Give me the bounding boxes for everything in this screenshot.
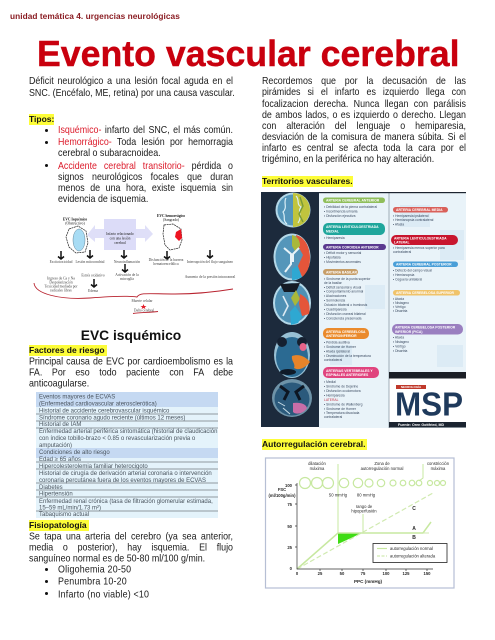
artery deficits: Oclusión bilateral o trombosis [324, 303, 368, 307]
artery deficits: ▪ Vértigo [393, 344, 406, 348]
list: flujo sanguíneo [45, 563, 149, 600]
list: tipos de EVC: evidencia de isquemia. [58, 193, 148, 204]
artery deficits: de la basilar [324, 281, 343, 285]
zone labels: autorregulación normal [361, 466, 403, 471]
scan 1 [276, 192, 310, 228]
list: tipos de EVC: cerebral o subaracnoidea. [58, 147, 161, 158]
artery deficits: ▪ Hemianopsia [393, 273, 414, 277]
artery pills: ARTERIA LENTICULOESTRIADA [394, 236, 447, 240]
outcome [131, 299, 158, 314]
table: eventos mayores de ECVAS: con índice tobillo-brazo < 0.85 o revascularización previa o [39, 436, 196, 442]
zone labels: máxima [310, 466, 325, 471]
axis labels: 75 [361, 571, 366, 576]
artery pills: MEDIAL [326, 230, 339, 234]
axis labels: 25 [318, 571, 323, 576]
artery deficits: ▪ Consciencia preservada [324, 316, 362, 320]
effect labels: radicales libres [50, 288, 72, 292]
artery deficits: ▪ Ceguera unilateral [393, 278, 422, 282]
artery deficits: contralateral [324, 415, 342, 419]
list: tipos de EVC: signos neurológicos focales que duran [58, 171, 233, 182]
axis labels: 0 [290, 566, 293, 571]
ischemic brain [63, 218, 88, 253]
ischemic brain: EVC Isquémico [63, 218, 87, 222]
scan 4 [274, 332, 310, 378]
text block: factores de riesgo: FA. Por eso todo paciente con FA debe [29, 366, 233, 377]
hypoperfusion area [338, 533, 362, 544]
zone labels: máxima [431, 466, 446, 471]
central box: cerebral [114, 241, 126, 245]
artery deficits: ▪ Hemianopsia contralateral [393, 218, 434, 222]
artery deficits: ▪ Vértigo [393, 305, 406, 309]
axis labels: PPC (mmHg) [354, 579, 383, 584]
list: tipos de EVC: Isquémico- infarto del SNC, el más común. [58, 124, 233, 135]
effect labels: Toxicidad mediada por [44, 284, 78, 288]
text block: factores de riesgo: anticoagularse. [29, 377, 89, 388]
artery deficits: ▪ Temperatura disociada [324, 411, 360, 415]
zone labels: rango de [356, 504, 373, 509]
axis labels: (ml/100g/min) [268, 493, 296, 498]
central box: con una lesión [110, 236, 131, 240]
axis labels: 100 [285, 483, 293, 488]
brain scans panel [261, 192, 319, 427]
zone labels: constricción [427, 461, 450, 466]
effect labels: Aumento de la presión intracraneal [185, 275, 235, 279]
effect labels: Estrés oxidativo [81, 274, 105, 278]
heading: territorios vasculares: Territorios vasculares. [262, 176, 353, 186]
artery deficits: ▪ Ataxia [393, 297, 404, 301]
artery deficits: ▪ Déficit motor y sensorial [324, 251, 362, 255]
artery pills: ARTERIA COROIDEA ANTERIOR [326, 245, 379, 249]
table: eventos mayores de ECVAS: coronaria percutánea fuera de los eventos mayores de ECVAS [39, 478, 206, 484]
artery deficits: ▪ Síndrome de la punta superior [324, 277, 371, 281]
effect labels: Despolarización [49, 280, 73, 284]
artery deficits: ▪ Hipofalsia [324, 256, 341, 260]
table: eventos mayores de ECVAS: Diabetes [39, 485, 63, 491]
artery deficits: ▪ Pérdida auditiva [324, 340, 350, 344]
outcome: Muerte celular [131, 299, 153, 303]
MSP logo: MSP [395, 386, 463, 422]
effect labels: Lesión mitocondrial [75, 260, 105, 264]
header: unit label: unidad temática 4. urgencias neurológicas [10, 11, 180, 21]
text block: decusación de las pirámides: con alteración del lenguaje o hemiparesia, [262, 120, 466, 131]
text block: decusación de las pirámides: infarto es central se afecta toda la cara por el [262, 142, 466, 153]
table: eventos mayores de ECVAS: Tabaquismo actual [39, 512, 89, 518]
artery deficits: ▪ Disartria [393, 309, 408, 313]
artery deficits: contralateral [324, 358, 342, 362]
scan 3 [273, 281, 311, 325]
heading: fisiopatología: Fisiopatología [29, 520, 87, 530]
axis labels: FSC [278, 487, 286, 492]
table: eventos mayores de ECVAS: 15–59 mL/min/1.73 m²) [39, 506, 101, 512]
curve letters [412, 506, 416, 541]
axis labels: 100 [382, 571, 390, 576]
artery deficits: ▪ Nistagmo [393, 301, 409, 305]
artery deficits: ▪ Incontinencia urinaria [324, 210, 358, 214]
vessel circles [300, 478, 446, 488]
curve letters: C [412, 506, 416, 512]
effect labels: microglía [120, 277, 134, 281]
text block: definition: SNC. (Encéfalo, ME, retina) por una causa vascular. [29, 87, 235, 98]
artery deficits: ▪ Disfunción oculomotora [324, 389, 361, 393]
artery deficits: ▪ Cuadriparesia [324, 308, 347, 312]
axis labels: 125 [402, 571, 410, 576]
zone labels: hipoperfusión [351, 508, 377, 514]
list: flujo sanguíneo: Infarto (no viable) <10 [58, 588, 149, 599]
artery deficits: ▪ Disartria [393, 349, 408, 353]
central box: Infarto relacionado [106, 232, 134, 236]
zone labels [308, 461, 450, 514]
axis labels: 0 [296, 571, 299, 576]
text block: fisiopatología: Se tapa una arteria del cerebro (ya sea anterior, [29, 530, 233, 541]
MSP logo [389, 372, 466, 428]
text block: decusación de las pirámides: Recordemos que por la decusación de las [262, 75, 466, 86]
text block: decusación de las pirámides: pirámides si el infarto es izquierdo llega con [262, 86, 466, 97]
red brace [34, 283, 233, 298]
central box [104, 219, 136, 250]
text block: decusación de las pirámides: desviación de la comisura de manera súbita. Si el [262, 131, 466, 142]
artery pills: INFERIOR (PICA) [395, 330, 423, 334]
zone dividers [338, 464, 423, 533]
artery pills: ARTERIAS VERTEBRALES Y [326, 369, 373, 373]
artery deficits: ▪ Alucinaciones [324, 294, 347, 298]
zone labels: 50 mmHg [329, 492, 348, 498]
effect labels: hematoencefálica [153, 262, 179, 266]
zone labels: dilatación [308, 461, 327, 466]
legend [373, 544, 447, 562]
legend: autorregulación alterada [390, 554, 436, 558]
hemorrhagic brain: (Sangrado) [163, 218, 180, 222]
artery pills: ARTERIA CEREBRAL ANTERIOR [326, 198, 380, 202]
effect labels: Excitotoxicidad [50, 260, 73, 264]
artery deficits: ▪ Afasia [393, 222, 404, 226]
effect labels: Interrupción del flujo sanguíneo [187, 260, 233, 264]
artery deficits: ▪ Comportamiento anormal [324, 290, 364, 294]
text block: decusación de las pirámides: de ambos lados, o es izquierdo o derecho. Llegan [262, 109, 466, 120]
normal autoregulation curve [297, 522, 431, 569]
artery pills [323, 198, 463, 378]
artery deficits: ▪ Nistagmo [393, 340, 409, 344]
list: tipos de EVC: Hemorrágico- Toda lesión por hemorragia [58, 136, 233, 147]
list: flujo sanguíneo: Oligohemia 20-50 [58, 563, 131, 574]
artery pills: ARTERIA BASILAR [326, 270, 358, 274]
text block: definition: Déficit neurológico a una lesión focal aguda en el [29, 75, 233, 86]
artery deficits: LATERAL [324, 398, 339, 402]
table: eventos mayores de ECVAS: Eventos mayores de ECVAS [39, 394, 115, 400]
text block: fisiopatología [29, 530, 233, 564]
axis labels: 75 [287, 502, 293, 507]
table: eventos mayores de ECVAS: Hipercolesterolemia familiar heterocigoto [39, 464, 148, 470]
effect labels [44, 258, 235, 293]
heading: tipos: Tipos: [29, 114, 54, 124]
axis labels: 50 [340, 571, 345, 576]
artery deficits: ▪ Hemiparesia menos superior para [393, 246, 445, 250]
arrows to both types [87, 225, 153, 242]
effect labels: Activación de la [115, 273, 139, 277]
text block: decusación de las pirámides [262, 75, 466, 164]
axes [295, 483, 433, 571]
list: tipos de EVC: Accidente cerebral transitorio- pérdida o [58, 160, 233, 171]
artery pills: ARTERIA CEREBELOSA POSTERIOR [395, 326, 456, 330]
artery pills: ARTERIA LENTICULOESTRIADA [326, 225, 379, 229]
artery deficits: ▪ Disfunción craneal bilateral [324, 312, 366, 316]
ischemic brain: (Obstructivo) [65, 222, 85, 226]
artery deficits: ▪ Déficit sensorial y visual [324, 286, 362, 290]
artery deficits: ▪ Ataxia [393, 336, 404, 340]
list: flujo sanguíneo: Penumbra 10-20 [58, 575, 127, 586]
table: eventos mayores de ECVAS: Edad ≥ 65 años [39, 457, 81, 463]
effect labels: Neuroinflamación [114, 260, 140, 264]
heading: EVC isquémico: EVC isquémico [81, 328, 181, 343]
text block: definition [29, 75, 235, 98]
axis labels: 150 [424, 571, 431, 576]
scan 5 [272, 379, 312, 417]
MSP logo: NEUROLOGÍA [401, 384, 422, 389]
artery deficits: ▪ Debilidad de la pierna contralateral [324, 205, 377, 209]
curve letters: A [412, 526, 416, 532]
legend: autorregulación normal [390, 546, 433, 551]
title: Evento vascular cerebral [37, 34, 460, 74]
artery deficits: ▪ Disminución de la temperatura [324, 354, 371, 358]
zone labels: Zona de [374, 461, 390, 466]
axis labels: 25 [287, 545, 293, 550]
list: tipos de EVC [45, 124, 233, 204]
text block: decusación de las pirámides: trigémino, en la periférica no hay alteración. [262, 153, 434, 164]
axis labels: 50 [287, 524, 293, 529]
artery deficits: ▪ Síndrome de Wallenberg [324, 402, 363, 406]
axis labels [268, 483, 431, 584]
table: eventos mayores de ECVAS: Condiciones de alto riesgo [39, 450, 110, 456]
artery deficits: ▪ Síndrome de Horner [324, 345, 357, 349]
list: tipos de EVC: menos de una hora, existe isquemia sin [58, 182, 233, 193]
table: eventos mayores de ECVAS: Enfermedad renal crónica (tasa de filtración glomerular estimada, [39, 499, 213, 505]
scan 2 [274, 234, 310, 280]
MSP logo: Fuente: Oren Gottfried, MD [398, 423, 445, 427]
heading: autorregulación cerebral: Autorregulación cerebral. [262, 439, 365, 449]
text block: fisiopatología: media o posterior), hay isquemia. El flujo [29, 541, 233, 552]
artery deficits: ▪ Hemiparesia [324, 236, 345, 240]
text block: decusación de las pirámides: focalizacion derecha. Nunca llegan con parálisis [262, 98, 466, 109]
artery deficits: ▪ Hemiparesia [324, 394, 345, 398]
artery deficits: ▪ Movimientos anormales [324, 260, 361, 264]
table: eventos mayores de ECVAS: (Enfermedad cardiovascular aterosclerótica) [39, 402, 157, 408]
hemorrhagic brain: EVC hemorrágico [157, 214, 185, 218]
artery pills: ESPINALES ANTERIORES [326, 373, 369, 377]
artery deficits: ▪ Somnolencia [324, 298, 345, 302]
artery deficits: ▪ Ataxia ipsilateral [324, 350, 350, 354]
curve letters: B [412, 535, 416, 541]
altered autoregulation curve [297, 493, 433, 569]
effect labels: Disfunción de la barrera [149, 258, 184, 262]
artery deficits: ▪ Síndrome de Horner [324, 407, 357, 411]
table: eventos mayores de ECVAS: Historial de cirugía de derivación arterial coronaria o intervención [39, 471, 212, 477]
table: eventos mayores de ECVAS: Enfermedad arterial periférica sintomática (historial de claudicación [39, 429, 217, 435]
text block: fisiopatología: sanguíneo normal es de 50-80 ml/100 g/min. [29, 552, 205, 563]
text block: factores de riesgo: Principal causa de EVC por cardioembolismo es la [29, 355, 233, 366]
artery deficits [324, 205, 445, 419]
text block: factores de riesgo [29, 355, 233, 388]
effect labels: Ingreso de Ca y Na [47, 276, 75, 280]
table: eventos mayores de ECVAS: Historial de accidente cerebrovascular isquémico [39, 408, 170, 414]
artery deficits: ▪ Medial [324, 380, 336, 384]
outcome: Daño cerebral [134, 308, 154, 312]
zone labels: 80 mmHg [357, 492, 376, 498]
artery deficits: ▪ Hemiparesia ipsilateral [393, 214, 429, 218]
artery deficits: ▪ Síndrome de Dejerine [324, 384, 358, 388]
artery pills: LATERAL [394, 240, 410, 244]
artery pills: ARTERIA CEREBELOSA SUPERIOR [396, 291, 455, 295]
effect labels: Edema [88, 289, 98, 293]
heading: factores de riesgo: Factores de riesgo [29, 345, 105, 355]
black down arrows [58, 250, 213, 287]
table: eventos mayores de ECVAS: Historial de IAM [39, 422, 81, 428]
artery pills: ARTERIA CEREBELOSA [326, 330, 366, 334]
artery deficits: contralateral [393, 250, 411, 254]
table: eventos mayores de ECVAS: Hipertensión [39, 492, 73, 498]
table: eventos mayores de ECVAS: Síndrome coronario agudo reciente (últimos 12 meses) [39, 416, 185, 422]
artery pills: ANTEROINFERIOR [326, 334, 357, 338]
artery deficits: ▪ Disfunción ejecutiva [324, 214, 356, 218]
artery deficits: ▪ Defecto del campo visual [393, 268, 432, 272]
artery pills: ARTERIA CEREBRAL MEDIA [396, 208, 443, 212]
hemorrhagic brain [157, 214, 185, 250]
table: eventos mayores de ECVAS: amputación) [39, 443, 72, 449]
artery pills: ARTERIA CEREBRAL POSTERIOR [396, 262, 452, 266]
